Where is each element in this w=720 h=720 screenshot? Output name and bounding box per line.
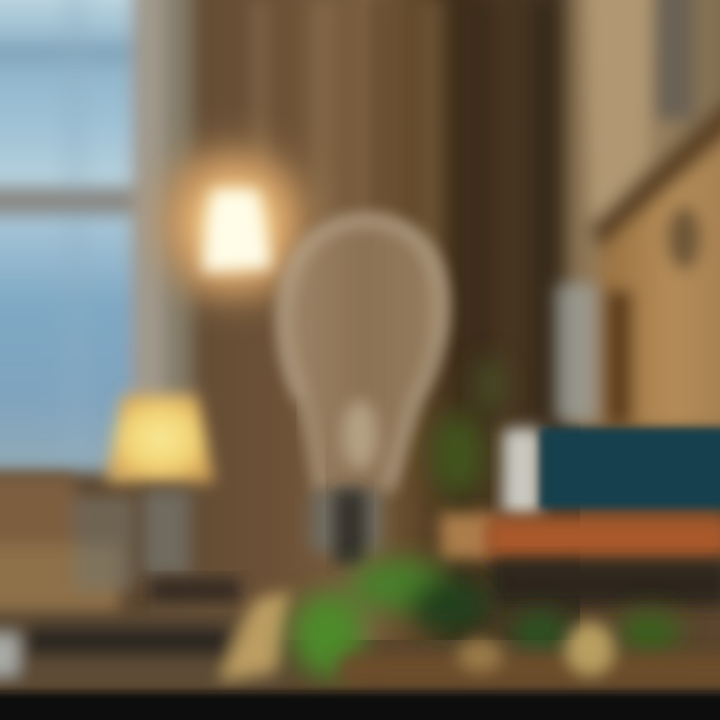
desk items: tray and papers	[0, 590, 290, 692]
book stack	[440, 428, 720, 606]
left foreground blurred objects	[0, 475, 135, 620]
icon: unlit glass light bulb	[281, 216, 446, 565]
desk surface and highlights	[0, 622, 720, 720]
icon: glowing light bulb	[158, 146, 306, 298]
window with sky panes	[0, 0, 195, 473]
plant leaves	[292, 357, 680, 677]
right wall with wooden panels	[555, 0, 720, 430]
icon: yellow table lamp	[106, 395, 240, 602]
